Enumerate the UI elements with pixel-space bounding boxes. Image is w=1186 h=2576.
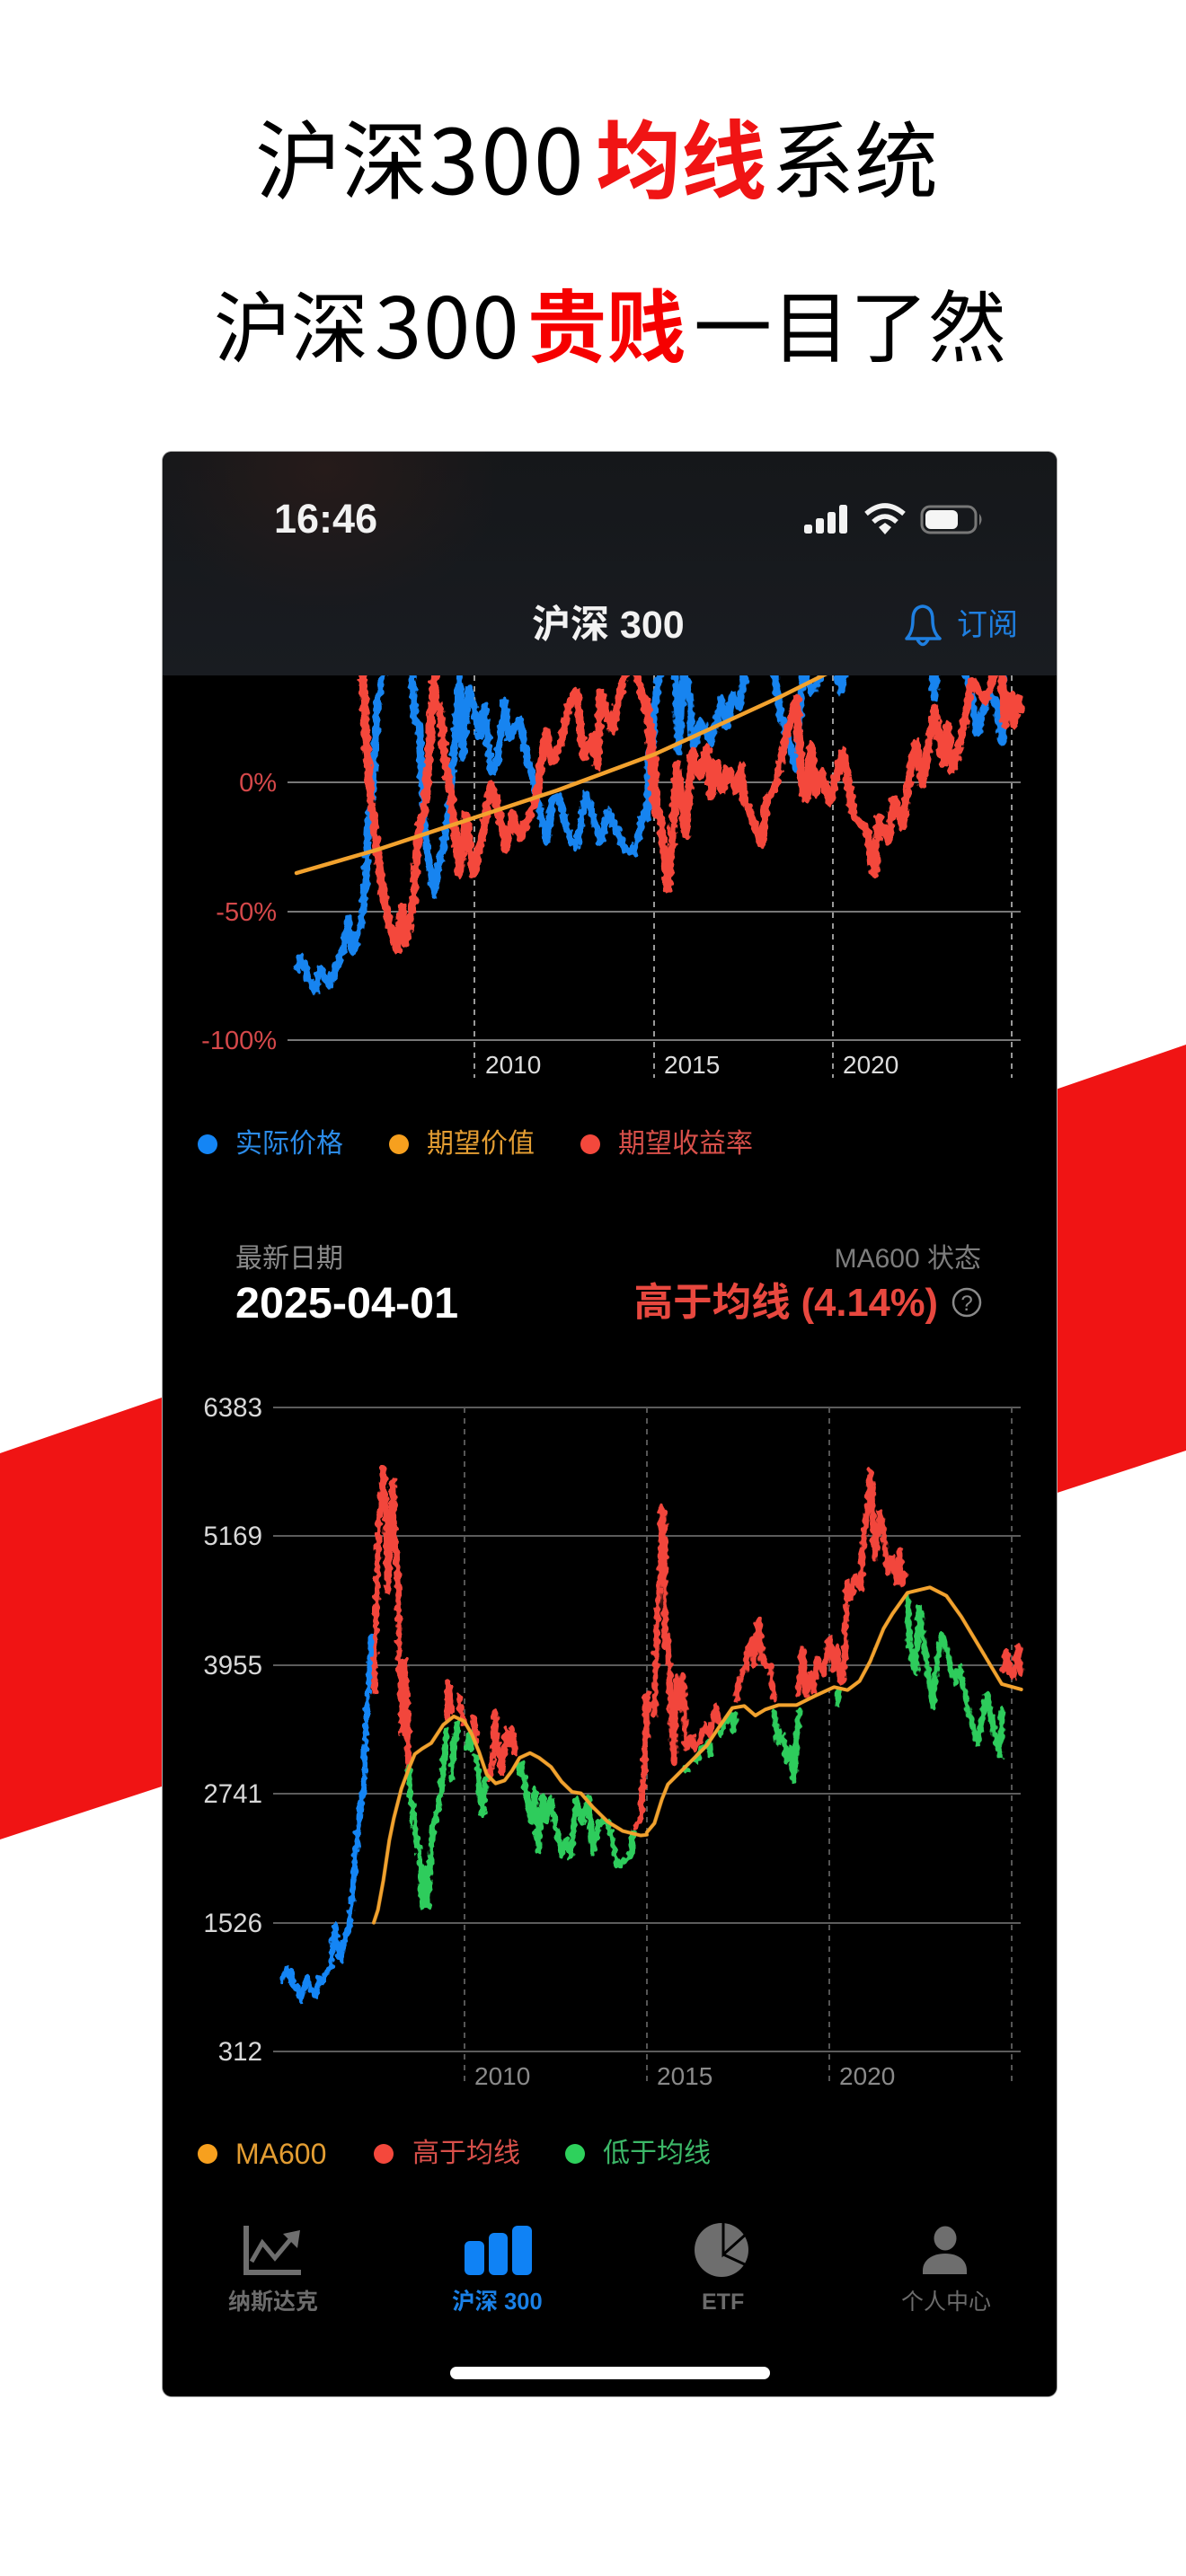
chart: expected value and return: -50% [216, 898, 277, 927]
legend item: expected return: 期望收益率 [618, 1129, 753, 1159]
chart: expected value and return [198, 675, 1025, 1141]
tab icon: person [923, 2226, 967, 2274]
app header [163, 452, 1057, 675]
nav title: 沪深 300 [532, 604, 685, 647]
chart: expected value and return: 2020 [843, 1051, 898, 1079]
title line 1: 均线 [596, 93, 766, 216]
label: latest date: 最新日期 [235, 1244, 343, 1274]
legend item: below MA: 低于均线 [603, 2139, 711, 2168]
label: MA600 status: MA600 状态 [835, 1244, 981, 1274]
legend: chart 2 [198, 2138, 711, 2170]
tab icon: bars active [465, 2226, 532, 2275]
subscribe label: 订阅 [957, 608, 1018, 642]
title line 1: 300 [429, 90, 586, 220]
chart: MA600: 1526 [203, 1909, 262, 1938]
title line 2: 一目了然 [694, 266, 1006, 379]
legend item: expected value: 期望价值 [427, 1129, 535, 1159]
title line 1 [255, 90, 938, 220]
title line 2: 沪深 [214, 266, 368, 378]
chart: expected value and return: 2010 [485, 1051, 541, 1079]
legend item: above MA: 高于均线 [412, 2139, 520, 2168]
title line 2: 300 [375, 261, 521, 384]
chart: MA600: 2020 [839, 2062, 895, 2090]
chart: expected value and return: 0% [239, 769, 277, 798]
legend item: MA600: MA600 [235, 2138, 326, 2170]
tab icon: pie [695, 2223, 748, 2277]
chart: MA600: 5169 [203, 1522, 262, 1551]
title line 2: 贵贱 [527, 265, 686, 379]
tab label: ETF: ETF [702, 2289, 744, 2315]
chart: expected value and return: 2015 [664, 1051, 720, 1079]
icon: help: ? [960, 1292, 973, 1316]
chart: MA600: 312 [218, 2037, 262, 2067]
chart: MA600: 2015 [657, 2062, 712, 2090]
title line 1: 系统 [771, 94, 938, 216]
chart: MA600: 2741 [203, 1779, 262, 1809]
chart: MA600: 2010 [474, 2062, 530, 2090]
value: latest date: 2025-04-01 [235, 1279, 458, 1328]
chart: expected value and return: -100% [201, 1027, 277, 1055]
status time: 16:46 [274, 496, 377, 542]
legend: chart 1 [198, 1129, 753, 1159]
phone screen panel [163, 452, 1057, 2396]
home indicator [450, 2367, 770, 2379]
status icons [804, 503, 981, 534]
value: MA600 status: 高于均线 (4.14%) [634, 1282, 938, 1325]
chart: MA600: 6383 [203, 1393, 262, 1423]
legend item: actual price: 实际价格 [235, 1129, 343, 1159]
chart: MA600: 3955 [203, 1651, 262, 1681]
tab icon: line chart [243, 2226, 301, 2275]
title line 2 [214, 261, 1006, 384]
tab label: nasdaq: 纳斯达克 [228, 2289, 318, 2315]
icon: bell [905, 604, 942, 647]
tab bar [228, 2223, 991, 2315]
tab label: CSI 300 active: 沪深 300 [452, 2289, 543, 2315]
title line 1: 沪深 [255, 93, 428, 217]
tab label: profile: 个人中心 [901, 2289, 991, 2315]
